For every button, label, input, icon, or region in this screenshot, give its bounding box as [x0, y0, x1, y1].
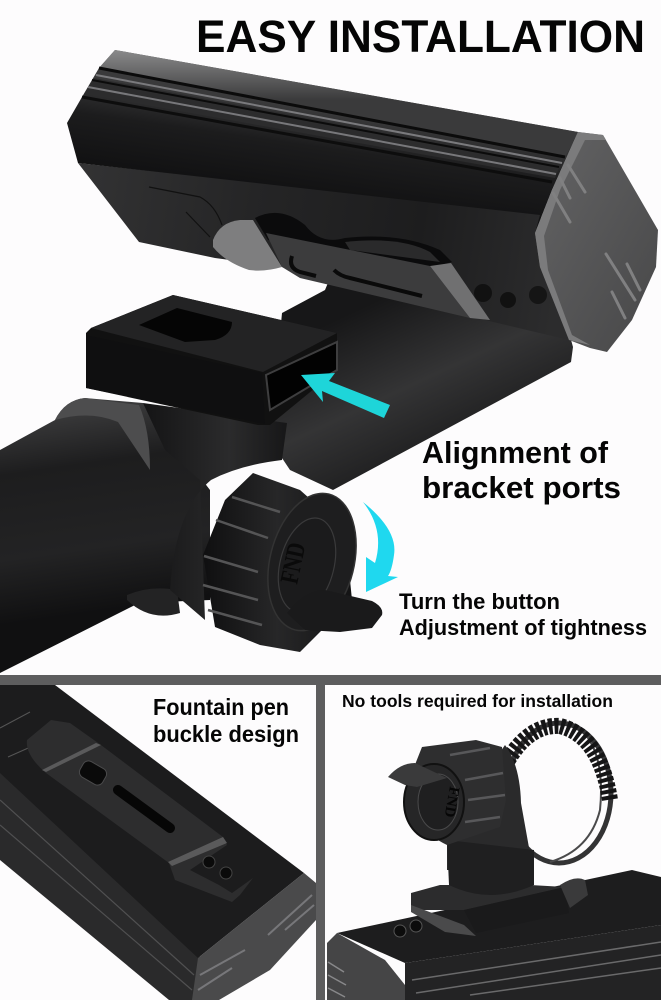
- handlebar tube left: [0, 398, 210, 673]
- usb port cover: [149, 187, 222, 237]
- plate screws: [474, 284, 492, 302]
- arm: [447, 745, 533, 870]
- knob lever: [287, 590, 382, 632]
- lamp top face: [337, 870, 661, 963]
- bracket port: [266, 342, 337, 410]
- bracket neck: [143, 403, 287, 620]
- label: alignment: Alignment of: [422, 435, 609, 470]
- cap vents: [198, 895, 314, 990]
- lamp side face: [0, 770, 200, 1000]
- lamp screws: [394, 925, 406, 937]
- lamp top face: [0, 685, 304, 958]
- threaded strap behind knob: [127, 588, 180, 616]
- lamp cap: [327, 933, 405, 1000]
- clip: [27, 720, 253, 902]
- knob face: [254, 484, 370, 640]
- knob logo: FND: [275, 540, 312, 586]
- label: alignment: bracket ports: [422, 470, 621, 505]
- clip tab: [560, 878, 588, 908]
- panel dividers: [0, 675, 661, 1000]
- mounting plate: [266, 233, 547, 320]
- cap: [192, 873, 316, 1000]
- knob face: [404, 764, 464, 840]
- label: turn the button: Turn the button: [399, 589, 560, 614]
- arrow: port alignment: [301, 373, 390, 418]
- plate slots: [291, 256, 316, 276]
- knob: [388, 740, 506, 845]
- usb mark: [0, 712, 35, 757]
- lamp side: [405, 925, 661, 1000]
- cap vents: [328, 962, 346, 997]
- title: EASY INSTALLATION: [196, 11, 645, 62]
- lamp body: [67, 50, 578, 340]
- logo: FND: [441, 785, 462, 819]
- panel: main installation view: [0, 50, 658, 673]
- label: buckle: Fountain pen: [153, 694, 289, 720]
- buckle clip: [213, 220, 282, 271]
- cap vents: [553, 165, 640, 318]
- strap ring: [507, 723, 611, 863]
- adapter base: [411, 885, 569, 936]
- bracket block: [86, 295, 337, 425]
- screws: [203, 856, 215, 868]
- neck: [447, 840, 534, 895]
- arrow: rotate knob: [363, 502, 398, 592]
- lamp grooves: [82, 68, 565, 182]
- top light band: [99, 50, 578, 157]
- clip slots: [77, 759, 109, 787]
- side grooves: [0, 800, 194, 990]
- shadow above plate: [255, 213, 452, 268]
- label: no tools: No tools required for installation: [342, 691, 613, 711]
- panel: no tools: [327, 691, 661, 1000]
- lever: [388, 763, 447, 787]
- top hole: [139, 308, 232, 342]
- handlebar tube behind bracket: [270, 278, 573, 490]
- side grooves: [412, 942, 661, 995]
- panel: fountain pen buckle: [0, 685, 316, 1000]
- knob ribs: [203, 497, 280, 625]
- lamp end cap: [535, 132, 658, 352]
- lamp top face: [67, 50, 578, 233]
- label: buckle: buckle design: [153, 721, 299, 747]
- label: turn the button: Adjustment of tightness: [399, 615, 647, 640]
- knob: [203, 473, 382, 652]
